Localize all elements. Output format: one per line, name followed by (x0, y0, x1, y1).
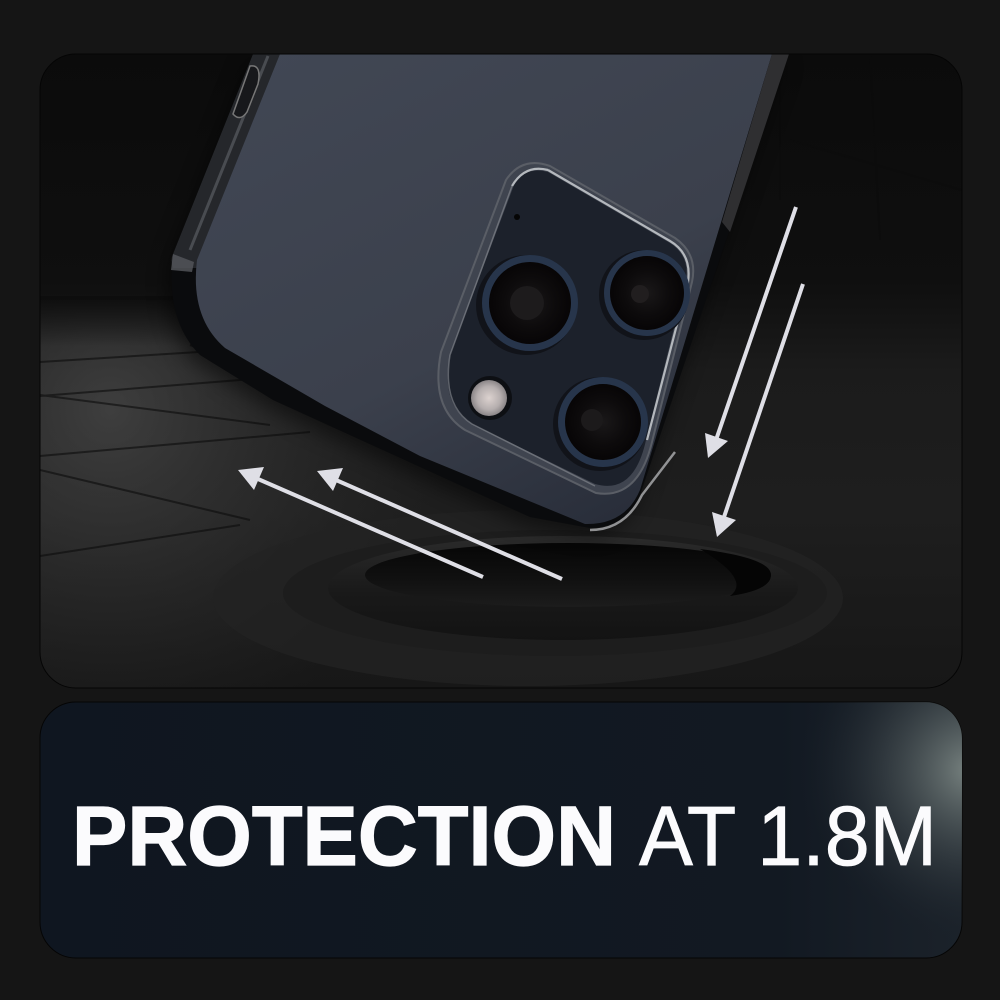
heading: protection at 1.8m (72, 789, 937, 883)
panel: drop scene (40, 54, 962, 688)
panel: caption bar (40, 702, 962, 958)
heading: protection at 1.8m: AT 1.8M (639, 789, 937, 883)
camera lens: bottom (553, 377, 648, 471)
heading: protection at 1.8m: PROTECTION (72, 789, 616, 883)
icon: phone in clear case (168, 54, 789, 536)
camera lens: top left (476, 255, 578, 355)
camera island (438, 163, 693, 494)
arrow: down 2 (712, 284, 803, 537)
impact ripples (365, 536, 771, 596)
arrow: rebound 1 (238, 467, 483, 577)
camera flash (468, 376, 512, 420)
camera lens: top right (599, 250, 690, 340)
arrow: down 1 (705, 207, 796, 458)
arrow: rebound 2 (317, 468, 562, 579)
